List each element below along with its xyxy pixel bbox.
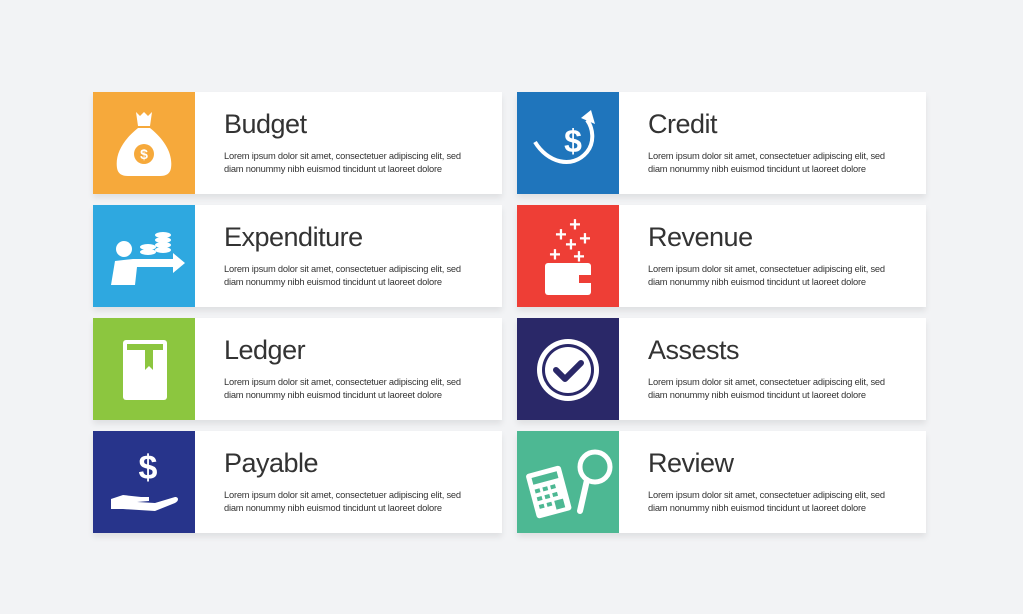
icon: hand dollar: $ xyxy=(139,449,158,487)
text: diam nonummy nibh euismod tincidunt ut laoreet dolore xyxy=(224,390,442,400)
text: Lorem ipsum dolor sit amet, consectetuer adipiscing elit, sed xyxy=(648,264,885,274)
icon: money bag: $ xyxy=(140,146,148,162)
text: Lorem ipsum dolor sit amet, consectetuer adipiscing elit, sed xyxy=(648,151,885,161)
icon: dollar arrow: $ xyxy=(564,123,582,159)
icon: check circle xyxy=(517,318,619,420)
text: diam nonummy nibh euismod tincidunt ut laoreet dolore xyxy=(224,276,442,286)
text xyxy=(224,264,461,287)
text xyxy=(224,377,461,400)
icon: calculator magnifier xyxy=(517,431,619,533)
card: Credit xyxy=(517,92,926,194)
title: Expenditure xyxy=(224,222,363,252)
text xyxy=(648,264,885,287)
card: Review xyxy=(517,431,926,533)
text: diam nonummy nibh euismod tincidunt ut laoreet dolore xyxy=(224,502,442,512)
card: Ledger xyxy=(93,318,502,420)
text xyxy=(648,151,885,174)
text xyxy=(224,151,461,174)
text: diam nonummy nibh euismod tincidunt ut laoreet dolore xyxy=(648,502,866,512)
icon: wallet plus: + xyxy=(579,228,591,250)
text xyxy=(648,377,885,400)
title: Credit xyxy=(648,109,717,139)
icon: dollar arrow xyxy=(517,92,619,194)
card: Expenditure xyxy=(93,205,502,307)
icon: money bag xyxy=(93,92,195,194)
text: Lorem ipsum dolor sit amet, consectetuer adipiscing elit, sed xyxy=(224,151,461,161)
title: Assests xyxy=(648,335,739,365)
icon: wallet plus xyxy=(517,205,619,307)
icon: hand dollar xyxy=(93,431,195,533)
text xyxy=(224,490,461,513)
card: Budget xyxy=(93,92,502,194)
text: Lorem ipsum dolor sit amet, consectetuer adipiscing elit, sed xyxy=(224,264,461,274)
text xyxy=(648,490,885,513)
icon: wallet plus: + xyxy=(565,234,577,256)
title: Ledger xyxy=(224,335,305,365)
text: diam nonummy nibh euismod tincidunt ut laoreet dolore xyxy=(648,276,866,286)
icon: wallet plus: + xyxy=(573,246,585,268)
icon: person coins xyxy=(93,205,195,307)
icon: wallet plus: + xyxy=(549,244,561,266)
text: Lorem ipsum dolor sit amet, consectetuer adipiscing elit, sed xyxy=(648,377,885,387)
text: Lorem ipsum dolor sit amet, consectetuer adipiscing elit, sed xyxy=(224,377,461,387)
text: diam nonummy nibh euismod tincidunt ut laoreet dolore xyxy=(224,164,442,174)
title: Budget xyxy=(224,109,307,139)
title: Revenue xyxy=(648,222,753,252)
icon: wallet plus: + xyxy=(569,214,581,236)
card: Revenue xyxy=(517,205,926,307)
card: Payable xyxy=(93,431,502,533)
text: Lorem ipsum dolor sit amet, consectetuer adipiscing elit, sed xyxy=(648,490,885,500)
text: diam nonummy nibh euismod tincidunt ut laoreet dolore xyxy=(648,164,866,174)
icon: wallet plus: + xyxy=(555,224,567,246)
card: Assests xyxy=(517,318,926,420)
title: Review xyxy=(648,448,734,478)
text: Lorem ipsum dolor sit amet, consectetuer adipiscing elit, sed xyxy=(224,490,461,500)
text: diam nonummy nibh euismod tincidunt ut laoreet dolore xyxy=(648,390,866,400)
title: Payable xyxy=(224,448,318,478)
icon: book xyxy=(93,318,195,420)
